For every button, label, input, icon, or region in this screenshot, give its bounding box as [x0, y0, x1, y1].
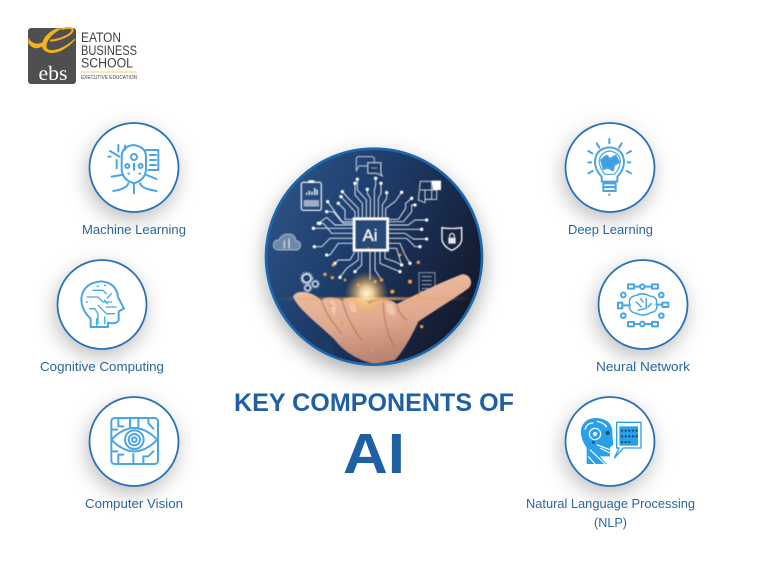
icon: cloud [273, 234, 300, 250]
light glow and streak [277, 272, 473, 315]
icon: gears [301, 272, 319, 292]
logo wordmark [81, 30, 137, 81]
circle [90, 397, 178, 486]
logo wordmark: SCHOOL [81, 56, 133, 70]
icon: AI head [108, 145, 158, 193]
title [234, 389, 514, 486]
node: Natural Language Processing [526, 397, 695, 530]
chip with Ai label [353, 217, 389, 252]
node: Cognitive Computing [40, 260, 164, 374]
circle [598, 260, 688, 349]
title: KEY COMPONENTS OF [234, 389, 514, 417]
label: Cognitive Computing [40, 359, 164, 374]
label: Machine Learning [82, 222, 186, 237]
label [526, 496, 695, 530]
title: AI [343, 422, 405, 486]
trace end dots [312, 177, 428, 279]
label: Computer Vision [85, 496, 183, 511]
label: (NLP) [594, 515, 627, 530]
circle [58, 260, 146, 349]
icon: robot head with speech bubble [581, 418, 641, 464]
glowing particles [323, 248, 423, 351]
node: Deep Learning [566, 123, 654, 237]
icon: brain light bulb [588, 139, 631, 195]
node: Machine Learning [82, 123, 186, 237]
hand [293, 274, 471, 367]
circle [90, 123, 178, 212]
icon: puzzle pieces [418, 181, 441, 203]
chip traces [312, 177, 428, 280]
icon: chat bubbles [356, 157, 382, 176]
logo: Eaton Business School [28, 28, 137, 85]
icon: eye on circuit [111, 418, 158, 464]
label: Natural Language Processing [526, 496, 695, 511]
logo wordmark: EATON [81, 30, 121, 45]
logo mark: ebs [38, 63, 68, 85]
icon: brain network [618, 284, 668, 326]
node: Neural Network [596, 260, 691, 374]
logo wordmark: EXECUTIVE EDUCATION [81, 75, 137, 81]
logo wordmark: BUSINESS [81, 43, 137, 58]
central image: hand holding AI chip [265, 147, 483, 367]
icon: head with circuits [81, 281, 124, 327]
icon: report clipboard [301, 180, 321, 210]
node: Computer Vision [85, 397, 183, 511]
circle [566, 123, 654, 212]
chip with Ai label: Ai [363, 226, 377, 245]
label: Neural Network [596, 359, 691, 374]
circle [566, 397, 654, 486]
label: Deep Learning [568, 222, 653, 237]
icon: checklist [419, 273, 435, 292]
icon: security shield [442, 228, 462, 250]
